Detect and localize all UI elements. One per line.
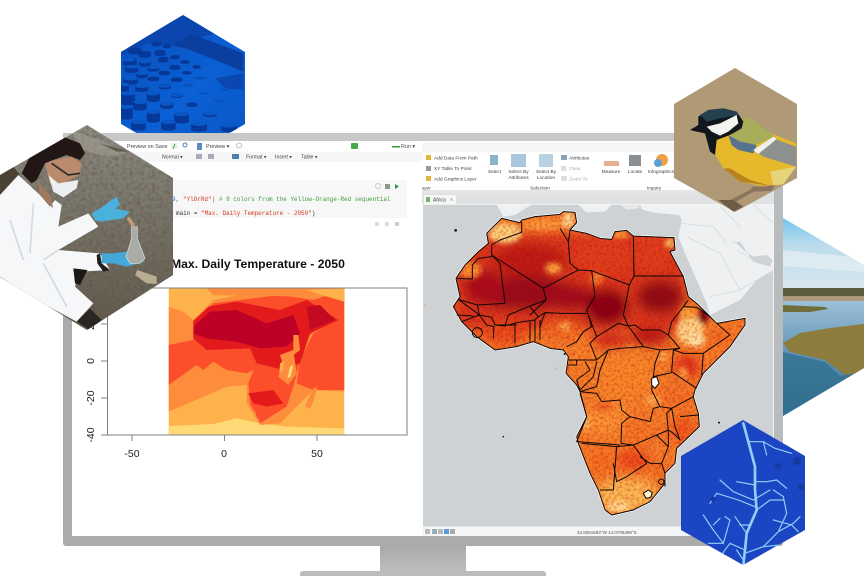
bird body — [713, 118, 796, 186]
monitor top bezel — [63, 133, 783, 142]
lower glove — [102, 252, 145, 267]
raster plot — [169, 288, 344, 435]
map tab: Africa — [433, 198, 446, 204]
neck — [38, 182, 53, 208]
editor toolbar: Preview ▾ — [206, 144, 230, 150]
x axis labels — [124, 448, 323, 460]
cylinders — [120, 42, 237, 132]
editor toolbar — [72, 141, 422, 162]
y axis labels: -20 — [85, 390, 97, 406]
y axis labels: 0 — [85, 358, 97, 364]
Eurasia basemap — [497, 205, 773, 315]
bird back — [730, 118, 775, 145]
monitor stand — [380, 545, 466, 572]
ribbon: Zoom To — [569, 176, 588, 182]
y axis labels: -40 — [85, 427, 97, 443]
monitor frame — [63, 133, 783, 546]
ribbon: Location — [537, 175, 555, 181]
code chunk: main = "Max. Daily Temperature - 2050") — [176, 210, 315, 217]
hexagon photo: great tit bird — [674, 68, 797, 212]
y axis labels — [85, 318, 97, 443]
code chunk: "YlOrRd") — [183, 196, 215, 203]
editor toolbar: Table ▾ — [301, 154, 318, 160]
sample tube — [127, 217, 135, 227]
hair — [22, 137, 85, 183]
ribbon: Add Graphics Layer — [434, 176, 477, 182]
ribbon: ayer — [422, 186, 431, 190]
monitor — [63, 133, 783, 576]
wing bar — [753, 137, 777, 154]
hexagon photo: coastal marsh — [783, 218, 864, 420]
ribbon: Attributes — [569, 156, 590, 162]
map tab — [422, 193, 774, 204]
bird legs and perch — [730, 185, 775, 203]
ribbon: Measure — [602, 169, 621, 175]
hexagon photo: river network — [681, 420, 805, 566]
ribbon: Locate — [628, 169, 643, 175]
editor toolbar: Run ▾ — [401, 144, 415, 150]
country borders — [453, 212, 745, 515]
RStudio panel — [72, 141, 422, 460]
coast halo — [453, 212, 745, 515]
ribbon: Add Data From Path — [434, 156, 478, 162]
ribbon: Infographics — [648, 169, 675, 175]
editor toolbar: Preview on Save — [127, 144, 167, 150]
small islands — [424, 229, 720, 437]
glass flask — [126, 227, 145, 263]
ribbon: Select — [488, 169, 502, 175]
temperature surface — [450, 210, 750, 520]
bird wing — [728, 135, 757, 153]
ribbon: Selection — [530, 186, 550, 192]
screen — [72, 141, 774, 536]
lab coat — [0, 175, 110, 322]
ribbon: XY Table To Point — [434, 166, 472, 172]
x axis labels: 50 — [311, 448, 323, 460]
bird head — [690, 108, 743, 155]
goggles — [52, 163, 80, 175]
river tributaries — [703, 442, 800, 560]
rocky ridge — [172, 34, 243, 72]
ribbon: Clear — [569, 166, 581, 172]
hexagon photo: scientist taking a sample — [0, 120, 177, 333]
editor toolbar: Normal ▾ — [162, 154, 183, 160]
ribbon — [422, 143, 774, 193]
bird cheek — [707, 115, 738, 136]
map tab: × — [450, 198, 453, 204]
ArcGIS Pro panel — [422, 143, 774, 536]
map status bar — [422, 527, 774, 536]
face — [45, 157, 82, 183]
monitor right bezel — [773, 140, 783, 540]
main river channel — [743, 423, 757, 565]
monitor base — [300, 571, 546, 576]
boot — [77, 308, 102, 330]
ribbon: Select By — [508, 169, 529, 175]
ribbon: Attributes — [508, 175, 529, 181]
heat map of Africa — [423, 205, 773, 527]
y axis labels: 20 — [85, 318, 97, 330]
map status bar: 34.6061683°W 14.0706399°S — [577, 530, 637, 535]
dark cuff — [97, 253, 110, 272]
ribbon: Inquiry — [647, 186, 662, 192]
editor toolbar: Format ▾ — [246, 154, 267, 160]
plot box and axes — [101, 288, 407, 441]
coat shading — [10, 203, 67, 307]
dark trousers — [73, 268, 87, 285]
x axis labels: 0 — [221, 448, 227, 460]
chart title: Max. Daily Temperature - 2050 — [171, 257, 345, 271]
tin can — [135, 270, 157, 284]
raster chart — [85, 288, 407, 460]
face mask — [48, 175, 78, 197]
ribbon: Select By — [536, 169, 557, 175]
code chunk: 9, — [172, 196, 179, 203]
code chunk — [72, 180, 407, 226]
x axis labels: -50 — [124, 448, 140, 460]
dark upper field — [121, 15, 215, 55]
code chunk: # 9 colors from the Yellow-Orange-Red sequential — [219, 196, 391, 203]
hexagon photo: blue cylinders — [120, 15, 245, 135]
upper glove — [92, 197, 130, 222]
editor toolbar: Insert ▾ — [275, 154, 292, 160]
